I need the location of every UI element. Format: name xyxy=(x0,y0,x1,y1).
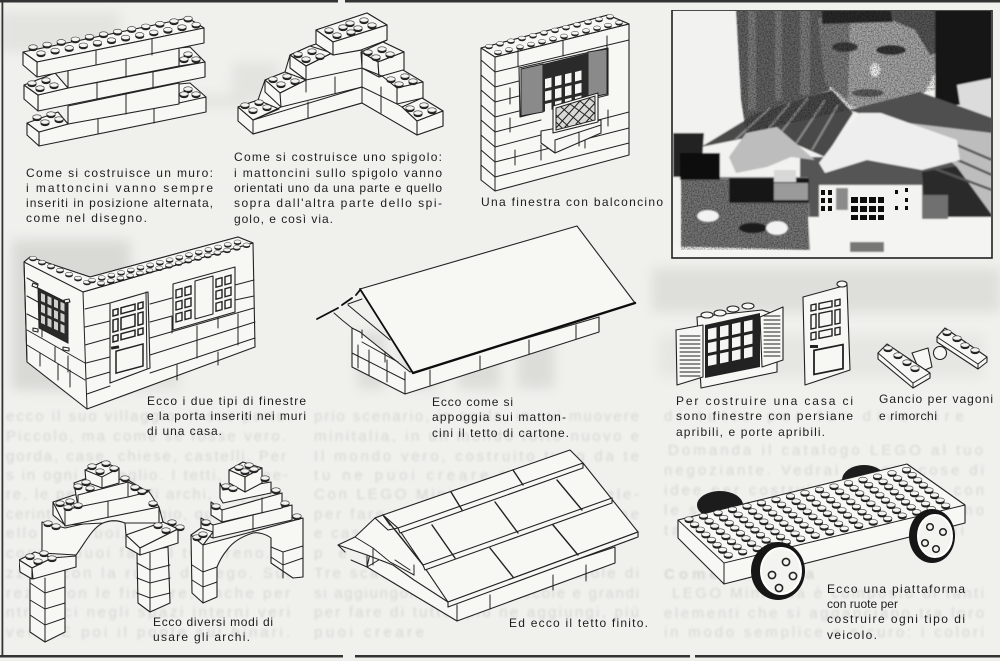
caption: windows and door: e la porta inseriti nei muri xyxy=(147,409,306,423)
show-through from the reverse page: Tre scatole di partenza, e scatole di xyxy=(314,565,639,582)
caption: wall: i mattoncini vanno sempre xyxy=(26,181,213,195)
caption: windows with shutters and doors: sono finestre con persiane xyxy=(676,409,853,423)
illustration: shutter window element xyxy=(676,303,783,388)
illustration: small arch xyxy=(191,462,303,603)
caption: corner: sopra dall'altra parte dello spi- xyxy=(234,196,442,210)
show-through from the reverse page: minitalia, in un mondo tutto nuovo e xyxy=(314,428,639,445)
caption: hook: Gancio per vagoni xyxy=(879,392,993,406)
show-through from the reverse page: ntroduci negli spazi interni veri xyxy=(6,604,290,621)
show-through from the reverse page: negoziante. Vedrai quante cose di xyxy=(664,462,984,479)
caption: wall: Come si costruisce un muro: xyxy=(26,166,213,180)
icon: balcony xyxy=(541,93,601,153)
caption: wall: inseriti in posizione alternata, xyxy=(26,196,213,210)
icon: front wheel xyxy=(751,542,805,600)
illustration: platform with wheels xyxy=(678,464,965,600)
caption: corner xyxy=(234,150,442,226)
show-through from the reverse page: si aggiungono, sempre piccole e grandi xyxy=(314,585,639,602)
illustration: how to build a corner xyxy=(238,13,443,135)
caption: platform: veicolo. xyxy=(827,628,877,642)
illustration: cardboard roof resting on bricks xyxy=(317,226,635,394)
show-through from the reverse page: per te xyxy=(314,545,434,562)
caption: arches xyxy=(153,615,273,644)
caption: cardboard roof: appoggia sui matton- xyxy=(432,410,566,424)
show-through from the reverse page: ecco il suo villaggio. Il suo porto. xyxy=(6,408,291,425)
illustration: house walls with windows and door xyxy=(24,237,255,409)
show-through from the reverse page: prio scenario, in scala, in cui muovere xyxy=(314,408,639,425)
icon: left window xyxy=(32,283,70,351)
caption: finished roof: Ed ecco il tetto finito. xyxy=(509,616,648,630)
illustration: how to build a wall xyxy=(23,16,206,146)
show-through from the reverse page: ello che vuoi. xyxy=(6,525,126,542)
show-through from the reverse page: le scatole del mondo LEGO. Sono xyxy=(664,502,984,519)
caption: hook xyxy=(879,392,993,423)
caption: wall: come nel disegno. xyxy=(26,211,147,225)
show-through from the reverse page: LEGO Minitalia è composto di tanti xyxy=(672,585,984,602)
icon: right window xyxy=(173,267,235,330)
right column xyxy=(137,547,170,612)
caption: platform: con ruote per xyxy=(827,597,898,611)
caption: platform: costruire ogni tipo di xyxy=(827,612,965,626)
caption: corner: Come si costruisce uno spigolo: xyxy=(234,150,442,164)
caption: windows with shutters and doors: apribili, e porte apribili. xyxy=(676,425,825,439)
caption: arches: usare gli archi. xyxy=(153,630,250,644)
illustration: large arch xyxy=(19,461,184,642)
show-through from the reverse page: rezzi con le finestre, anche per xyxy=(6,585,290,602)
caption: platform: Ecco una piattaforma xyxy=(827,582,965,596)
illustration: door element xyxy=(803,281,850,385)
caption: windows and door: Ecco i due tipi di finestre xyxy=(147,394,306,408)
show-through from the reverse page: tantissime e tutte componibili xyxy=(664,522,964,539)
show-through from the reverse page: re, le persiane, gli archi, le porte. xyxy=(6,486,288,503)
caption: corner: orientati uno da una parte e quello xyxy=(234,181,442,195)
illustration: hook for wagons xyxy=(878,328,987,388)
caption: corner: i mattoncini sullo spigolo vanno xyxy=(234,166,442,180)
show-through from the reverse page: Domanda il catalogo LEGO al tuo xyxy=(668,442,983,459)
show-through from the reverse page: e case, e puoi costruire il tuo mondo xyxy=(314,525,639,542)
show-through from the reverse page: idee per costruire e inventare con xyxy=(664,482,984,499)
show-through from the reverse page: elementi che si agganciano tra loro xyxy=(664,605,984,622)
show-through from the reverse page: gorda, case, chiese, castelli. Per xyxy=(6,448,286,465)
show-through from the reverse page: in modo semplice e sicuro: i colori xyxy=(664,624,984,641)
icon: right wheel xyxy=(909,509,955,563)
illustration: wall with window and balcony xyxy=(481,14,629,191)
show-through from the reverse page: vere. E poi il ponte sui binari. xyxy=(6,624,290,641)
caption: hook: e rimorchi xyxy=(879,409,937,423)
caption: windows and door: di una casa. xyxy=(147,424,222,438)
show-through from the reverse page: Con LEGO Minitalia ci sono gli ele- xyxy=(314,486,639,503)
left column xyxy=(30,570,65,642)
show-through from the reverse page: per fare tutti i giochi di costruzione xyxy=(314,506,639,523)
show-through from the reverse page: di tutto per far divertire xyxy=(664,408,964,425)
show-through from the reverse page: Come si gioca xyxy=(664,566,815,583)
show-through from the reverse page: cerinto il tuo villaggio, quanto vuoi xyxy=(6,506,288,523)
show-through from the reverse page: Il mondo vero, costruito tutto da te xyxy=(314,448,639,465)
caption: windows and door xyxy=(147,394,306,438)
caption: arches: Ecco diversi modi di xyxy=(153,615,273,629)
illustration: finished roof xyxy=(338,450,638,621)
show-through from the reverse page: tu ne puoi creare tanti xyxy=(314,467,544,484)
caption: cardboard roof: cini il tetto di cartone. xyxy=(432,426,569,440)
caption: windows with shutters and doors xyxy=(676,394,853,439)
caption: wall xyxy=(26,166,213,225)
show-through from the reverse page: Piccolo, ma come se fosse vero. xyxy=(6,428,286,445)
caption: cardboard roof: Ecco come si xyxy=(432,395,513,409)
caption: cardboard roof xyxy=(432,395,569,440)
caption: platform xyxy=(827,582,965,642)
caption: window with balcony: Una finestra con balconcino xyxy=(481,195,663,209)
show-through from the reverse page: puoi creare xyxy=(314,624,424,641)
show-through from the reverse page: zzino con la ruota di Lego. Sul xyxy=(6,565,290,582)
show-through from the reverse page: s in ogni dettaglio. I tetti, le fine- xyxy=(6,467,288,484)
show-through from the reverse page: per fare di tutto: più ne aggiungi, più xyxy=(314,604,639,621)
icon: back wheels xyxy=(697,465,886,519)
icon: door xyxy=(110,292,150,383)
caption: windows with shutters and doors: Per costruire una casa ci xyxy=(676,394,853,408)
photo: boy building with bricks xyxy=(672,10,992,258)
show-through from the reverse page: coppie puoi fare il tuo treno. E xyxy=(6,545,290,562)
caption: corner: golo, e così via. xyxy=(234,212,333,226)
icon: window with shutters xyxy=(519,48,608,117)
